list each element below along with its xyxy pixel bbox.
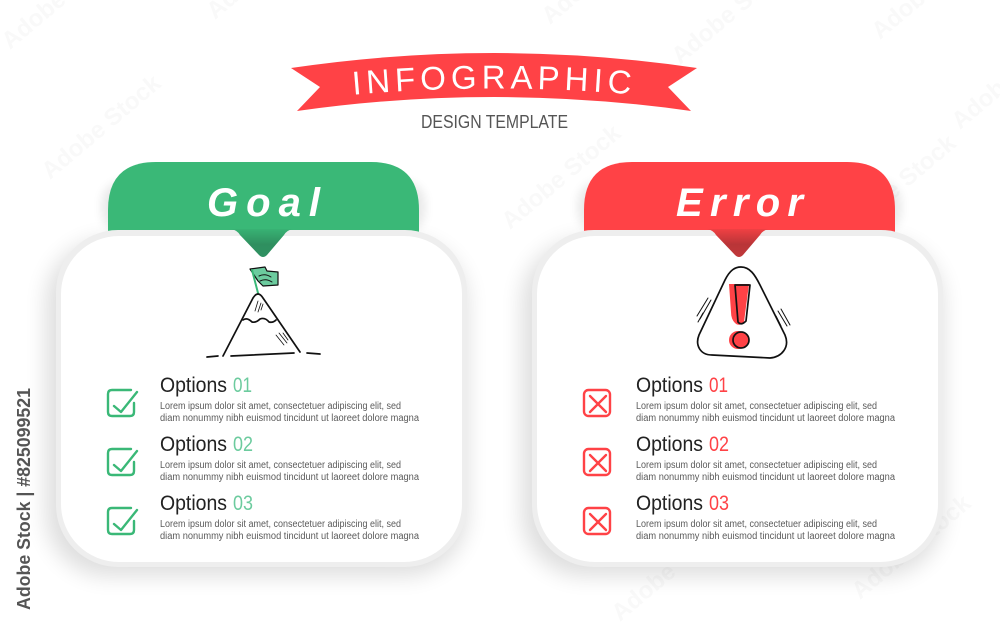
goal heading: Goal (207, 181, 321, 225)
cross icon (584, 449, 610, 475)
watermark pattern: Adobe Stock (37, 69, 167, 185)
check icon (108, 390, 137, 416)
option text: Lorem ipsum dolor sit amet, consectetuer adipiscing elit, sed (160, 401, 401, 412)
option 2 (584, 433, 895, 483)
goal panel shadow (46, 182, 467, 576)
ribbon title text: INFOGRAPHIC (354, 66, 630, 94)
error card (532, 230, 943, 567)
goal header tab (108, 162, 419, 240)
goal pointer (231, 229, 293, 257)
option heading: Options (636, 374, 703, 397)
option 1 (584, 374, 895, 424)
check icon (108, 449, 137, 475)
option heading: 03 (233, 492, 253, 515)
icon: warning triangle (697, 267, 790, 358)
option text: Lorem ipsum dolor sit amet, consectetuer adipiscing elit, sed (160, 519, 401, 530)
option heading: 02 (709, 433, 729, 456)
option heading: 01 (709, 374, 728, 397)
watermark pattern: Adobe Stock (607, 511, 737, 625)
option heading: Options (636, 433, 703, 456)
option text (636, 460, 895, 483)
panel: error (522, 162, 943, 576)
option text: Lorem ipsum dolor sit amet, consectetuer adipiscing elit, sed (636, 401, 877, 412)
option heading: Options (160, 374, 227, 397)
option text: Lorem ipsum dolor sit amet, consectetuer adipiscing elit, sed (636, 519, 877, 530)
watermark pattern: Adobe Stock (847, 489, 977, 605)
option text (160, 460, 419, 483)
option text: Lorem ipsum dolor sit amet, consectetuer adipiscing elit, sed (160, 460, 401, 471)
option 3 (584, 492, 895, 542)
option 1 (108, 374, 419, 424)
option text: Lorem ipsum dolor sit amet, consectetuer adipiscing elit, sed (636, 460, 877, 471)
error heading: Error (676, 181, 805, 225)
option text (160, 519, 419, 542)
option text (636, 519, 895, 542)
option text (160, 401, 419, 424)
option 2 (108, 433, 419, 483)
option heading: 01 (233, 374, 252, 397)
watermark pattern: Adobe Stock (832, 129, 962, 245)
subtitle: DESIGN TEMPLATE (421, 112, 568, 132)
option text (636, 401, 895, 424)
option heading: Options (160, 492, 227, 515)
goal card (56, 230, 467, 567)
watermark pattern: Adobe Stock (497, 119, 627, 235)
option heading: Options (636, 492, 703, 515)
cross icon (584, 390, 610, 416)
option text: diam nonummy nibh euismod tincidunt ut laoreet dolore magna (636, 531, 895, 542)
check icon (108, 508, 137, 534)
error pointer (707, 229, 769, 257)
option text: diam nonummy nibh euismod tincidunt ut laoreet dolore magna (160, 413, 419, 424)
cross icon (584, 508, 610, 534)
stock id side label: Adobe Stock | #825099521 (14, 388, 34, 610)
option text: diam nonummy nibh euismod tincidunt ut laoreet dolore magna (160, 472, 419, 483)
option 3 (108, 492, 419, 542)
option heading: Options (160, 433, 227, 456)
option heading: 02 (233, 433, 253, 456)
option heading: 03 (709, 492, 729, 515)
title ribbon (291, 53, 697, 111)
option text: diam nonummy nibh euismod tincidunt ut laoreet dolore magna (636, 413, 895, 424)
option text: diam nonummy nibh euismod tincidunt ut laoreet dolore magna (160, 531, 419, 542)
icon: mountain with flag (207, 267, 320, 357)
panel: goal (46, 162, 467, 576)
error panel shadow (522, 182, 943, 576)
error header tab (584, 162, 895, 240)
option text: diam nonummy nibh euismod tincidunt ut laoreet dolore magna (636, 472, 895, 483)
